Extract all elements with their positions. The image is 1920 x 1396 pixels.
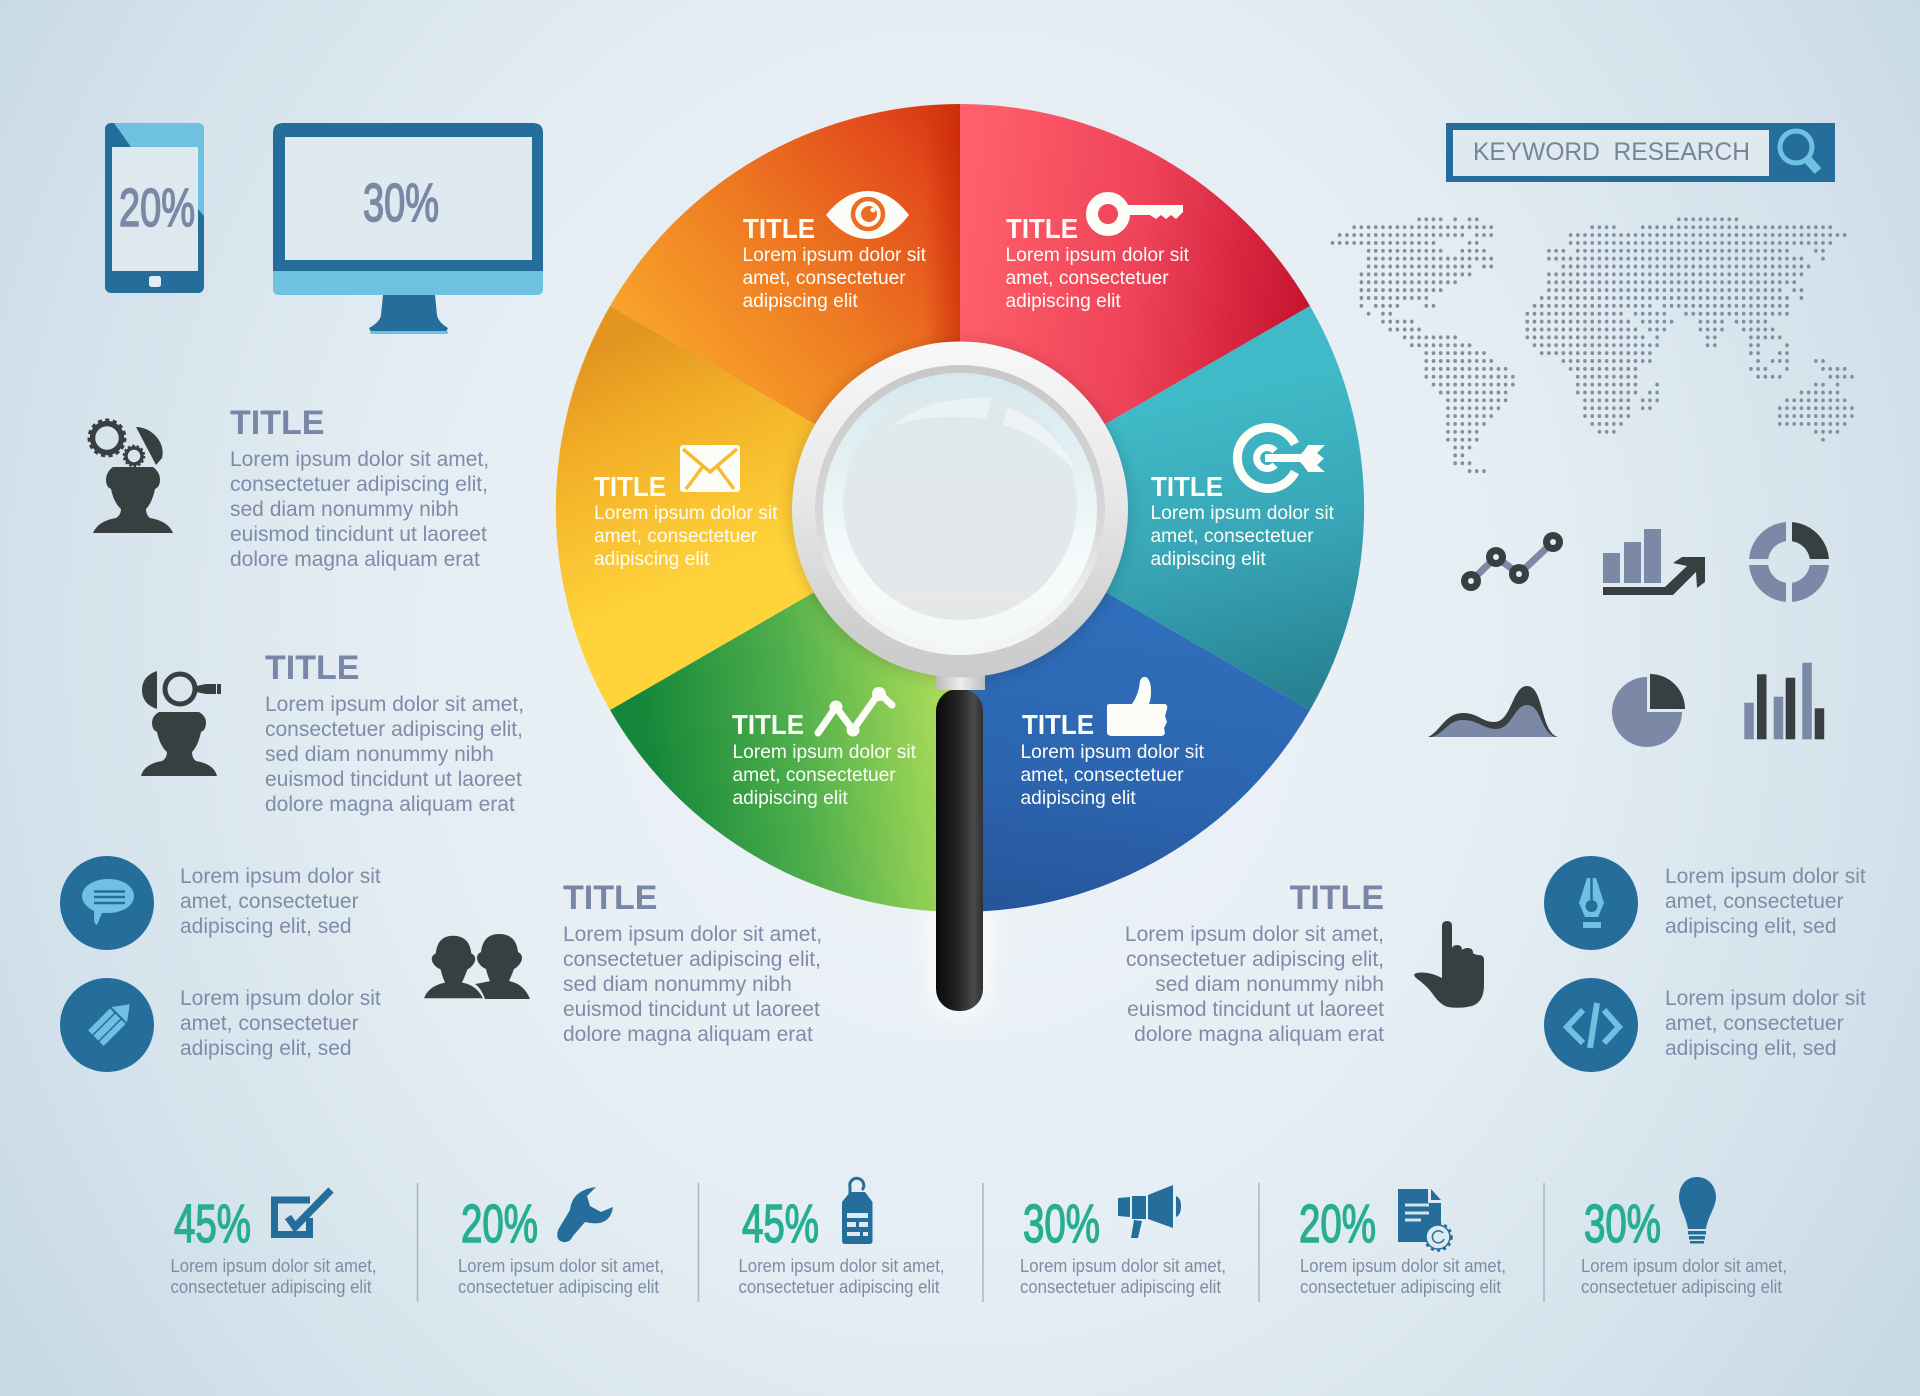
icon: line chart [1461, 532, 1563, 591]
icon: speech bubble circle [60, 856, 154, 950]
icon: bar chart [1744, 663, 1824, 739]
slice content: teal, target: Lorem ipsum dolor sit [1150, 503, 1335, 524]
slice content: blue, thumbs up: adipiscing elit [1020, 788, 1136, 809]
stat: 30% megaphone [1020, 1185, 1226, 1297]
lens glass [823, 373, 1097, 647]
text block: pencil note [180, 987, 381, 1060]
stat: 20% document: Lorem ipsum dolor sit amet, [1300, 1256, 1506, 1276]
text block: title 1: Lorem ipsum dolor sit amet, [230, 448, 489, 471]
text block: speech note [180, 865, 381, 938]
text block: right center title: euismod tincidunt ut laoreet [1127, 998, 1384, 1021]
slice content: yellow, envelope: amet, consectetuer [594, 526, 758, 547]
stat: 45% check: consectetuer adipiscing elit [170, 1277, 372, 1297]
text block: title 1: consectetuer adipiscing elit, [230, 473, 488, 496]
text block: pencil note: adipiscing elit, sed [180, 1037, 352, 1060]
divider lines [418, 1183, 1544, 1302]
stat: 20% wrench [458, 1187, 664, 1297]
icon: area chart [1428, 686, 1558, 737]
slice content: blue, thumbs up: TITLE [1022, 709, 1094, 740]
slice content: blue, thumbs up [1020, 677, 1205, 809]
text block: title 2: Lorem ipsum dolor sit amet, [265, 693, 524, 716]
text block: right center title: sed diam nonummy nibh [1155, 973, 1384, 996]
text block: right center title: Lorem ipsum dolor sit amet, [1125, 923, 1384, 946]
text block: left center title: consectetuer adipiscing elit, [563, 948, 821, 971]
slice content: red, key: amet, consectetuer [1006, 268, 1169, 289]
stat: 20% wrench: consectetuer adipiscing elit [458, 1277, 659, 1297]
icon: head with magnifier [141, 671, 221, 776]
text block: title 2: consectetuer adipiscing elit, [265, 718, 523, 741]
text block: speech note: adipiscing elit, sed [180, 915, 352, 938]
slice content: teal, target [1150, 427, 1335, 570]
icon: bars with arrow [1603, 529, 1705, 595]
slice content: red, key: Lorem ipsum dolor sit [1006, 245, 1190, 266]
slice: yellow [556, 306, 960, 710]
slice: red [960, 104, 1310, 508]
icon: desktop monitor with 30%: 30% [363, 173, 439, 233]
stat: 45% tag: consectetuer adipiscing elit [738, 1277, 940, 1297]
text block: code note [1665, 987, 1866, 1060]
text block: pen note: Lorem ipsum dolor sit [1665, 865, 1866, 888]
stat: 20% wrench: 20% [461, 1194, 538, 1254]
slice content: orange, eye: Lorem ipsum dolor sit [742, 245, 927, 266]
text block: pen note: adipiscing elit, sed [1665, 915, 1837, 938]
slice content: blue, thumbs up: amet, consectetuer [1020, 765, 1184, 786]
stat: 30% light bulb: Lorem ipsum dolor sit amet, [1581, 1256, 1787, 1276]
stat: 20% wrench: Lorem ipsum dolor sit amet, [458, 1256, 664, 1276]
slice content: teal, target: amet, consectetuer [1150, 526, 1314, 547]
text block: title 2: euismod tincidunt ut laoreet [265, 768, 522, 791]
text block: title 1: sed diam nonummy nibh [230, 498, 459, 521]
slice content: green, trend: TITLE [732, 709, 804, 740]
slice content: green, trend [732, 687, 917, 809]
handle neck [936, 672, 985, 690]
handle [936, 689, 983, 1011]
icon: pie chart [1612, 674, 1685, 747]
text block: right center title [1125, 879, 1384, 1046]
stat: 45% check: Lorem ipsum dolor sit amet, [170, 1256, 376, 1276]
icon: pencil circle [60, 978, 154, 1072]
icon: tablet with 20% [105, 123, 204, 293]
text block: right center title: dolore magna aliquam erat [1134, 1023, 1384, 1046]
text block: pencil note: Lorem ipsum dolor sit [180, 987, 381, 1010]
icon: pointing hand [1414, 921, 1484, 1008]
slice content: teal, target: TITLE [1151, 471, 1223, 502]
stat: 45% check [170, 1190, 376, 1297]
text block: code note: adipiscing elit, sed [1665, 1037, 1837, 1060]
slice content: orange, eye [742, 191, 927, 312]
icon: two people [423, 934, 530, 999]
magnifying glass [791, 342, 1129, 1011]
slice: orange [610, 104, 960, 508]
text block: left center title: Lorem ipsum dolor sit amet, [563, 923, 822, 946]
lens reflection right [1003, 407, 1075, 470]
text block: code note: Lorem ipsum dolor sit [1665, 987, 1866, 1010]
text block: title 1: TITLE [230, 404, 324, 442]
text block: right center title: TITLE [1290, 879, 1384, 917]
icon: code circle [1544, 978, 1638, 1072]
icon: pen nib circle [1544, 856, 1638, 950]
stat: 45% tag [738, 1178, 944, 1297]
stat: 45% tag: Lorem ipsum dolor sit amet, [738, 1256, 944, 1276]
slice content: orange, eye: TITLE [743, 213, 815, 244]
slice content: teal, target: adipiscing elit [1150, 549, 1266, 570]
lens rim [792, 342, 1128, 678]
slice content: blue, thumbs up: Lorem ipsum dolor sit [1020, 742, 1205, 763]
text block: left center title: TITLE [563, 879, 657, 917]
text block: right center title: consectetuer adipiscing elit, [1126, 948, 1384, 971]
search box: keyword research: KEYWORD RESEARCH [1473, 138, 1750, 166]
search box: keyword research [1446, 123, 1835, 182]
stat: 30% megaphone: 30% [1023, 1194, 1100, 1254]
text block: title 2: TITLE [265, 649, 359, 687]
stat: 30% light bulb: consectetuer adipiscing elit [1581, 1277, 1782, 1297]
text block: pen note [1665, 865, 1866, 938]
text block: title 1 [230, 404, 489, 571]
slice content: green, trend: amet, consectetuer [732, 765, 896, 786]
text block: pencil note: amet, consectetuer [180, 1012, 359, 1035]
slice content: orange, eye: amet, consectetuer [742, 268, 906, 289]
magnifier handle glow [926, 880, 994, 1020]
stat: 20% document: consectetuer adipiscing elit [1300, 1277, 1501, 1297]
stat: 30% light bulb [1581, 1177, 1787, 1297]
stat: 45% tag: 45% [742, 1194, 819, 1254]
icon: donut chart [1749, 522, 1829, 602]
slice content: yellow, envelope: adipiscing elit [594, 549, 710, 570]
text block: left center title: dolore magna aliquam erat [563, 1023, 813, 1046]
slice content: red, key: TITLE [1006, 213, 1078, 244]
text block: speech note: Lorem ipsum dolor sit [180, 865, 381, 888]
icon: desktop monitor with 30% [273, 123, 543, 334]
slice: blue [960, 508, 1310, 912]
lens reflection left [890, 398, 992, 427]
icon: tablet with 20%: 20% [119, 178, 195, 238]
slice content: red, key: adipiscing elit [1006, 291, 1121, 312]
slice content: green, trend: adipiscing elit [732, 788, 848, 809]
stat: 20% document [1299, 1189, 1506, 1297]
stat: 30% megaphone: Lorem ipsum dolor sit amet, [1020, 1256, 1226, 1276]
wheel chart: six slices [556, 104, 1364, 912]
text block: left center title [563, 879, 822, 1046]
text block: title 2 [265, 649, 524, 816]
slice content: yellow, envelope: TITLE [594, 471, 666, 502]
text block: title 1: dolore magna aliquam erat [230, 548, 480, 571]
text block: title 2: sed diam nonummy nibh [265, 743, 494, 766]
slice content: red, key [1006, 198, 1190, 312]
stat: 45% check: 45% [174, 1194, 251, 1254]
slice: green [610, 508, 960, 912]
text block: left center title: euismod tincidunt ut laoreet [563, 998, 820, 1021]
text block: title 1: euismod tincidunt ut laoreet [230, 523, 487, 546]
slice content: green, trend: Lorem ipsum dolor sit [732, 742, 917, 763]
text block: title 2: dolore magna aliquam erat [265, 793, 515, 816]
dotted world map [1332, 219, 1852, 471]
stat: 30% megaphone: consectetuer adipiscing elit [1020, 1277, 1221, 1297]
text block: pen note: amet, consectetuer [1665, 890, 1844, 913]
text block: speech note: amet, consectetuer [180, 890, 359, 913]
icon: head with gears [90, 420, 173, 533]
slice: teal [960, 306, 1364, 710]
text block: code note: amet, consectetuer [1665, 1012, 1844, 1035]
text block: left center title: sed diam nonummy nibh [563, 973, 792, 996]
stat: 20% document: 20% [1299, 1194, 1376, 1254]
slice content: orange, eye: adipiscing elit [742, 291, 858, 312]
slice content: yellow, envelope [594, 445, 778, 570]
stat: 30% light bulb: 30% [1584, 1194, 1661, 1254]
slice content: yellow, envelope: Lorem ipsum dolor sit [594, 503, 778, 524]
